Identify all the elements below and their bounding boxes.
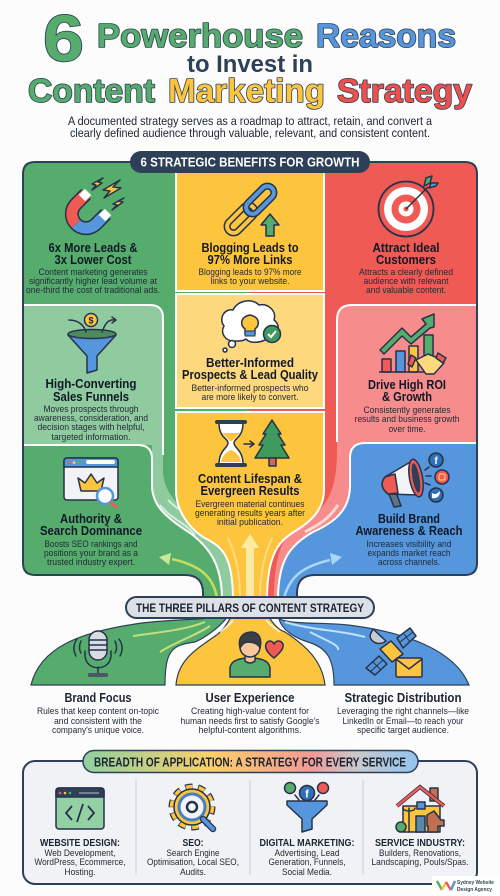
pillar shape: blue <box>279 619 469 685</box>
text: roi: results and business growth <box>354 414 460 424</box>
icon: person and heart <box>230 632 283 677</box>
text: blogging: Blogging Leads to <box>202 241 299 255</box>
text: better-informed <box>182 356 318 402</box>
text: better-informed: Better-informed prospects who <box>192 383 308 393</box>
text: funnels: High-Converting <box>46 377 136 391</box>
text: authority: trusted industry expert. <box>47 557 135 567</box>
text: website design: Web Development, <box>44 848 116 858</box>
text: user experience: helpful-content algorithms. <box>198 725 302 735</box>
text: website design <box>34 838 126 877</box>
text: reach <box>356 512 462 567</box>
text: website design: WEBSITE DESIGN: <box>40 838 120 849</box>
text: strategic distribution: Leveraging the right channels—like <box>337 706 469 716</box>
text: leads: 6x More Leads & <box>48 241 138 255</box>
text: reach: Build Brand <box>378 512 440 526</box>
title <box>28 1 473 109</box>
arrow: flow to reach <box>284 553 342 598</box>
icon: growth chart and handshake <box>379 314 446 374</box>
text: brand focus <box>37 690 159 735</box>
title: Powerhouse <box>97 17 303 54</box>
text: brand focus: Rules that keep content on-topic <box>37 706 159 716</box>
text: reach: Awareness & Reach <box>356 524 462 538</box>
text: evergreen: initial publication. <box>217 517 283 527</box>
text: strategic distribution <box>337 690 469 735</box>
icon: megaphone and social <box>382 453 449 507</box>
text: digital marketing: Generation, Funnels, <box>268 857 346 867</box>
text: leads: significantly higher lead volume at <box>29 276 157 286</box>
text: service industry: Landscaping, Pouls/Spas. <box>372 857 468 867</box>
text: seo: Audits. <box>180 867 206 877</box>
icon: funnel: $ <box>88 316 94 326</box>
text: evergreen: generating results years after <box>195 508 305 518</box>
text: better-informed: Prospects & Lead Quality <box>182 368 318 382</box>
text: funnels: awareness, consideration, and <box>34 413 148 423</box>
arrow: flow to authority <box>159 553 217 598</box>
text: seo: Optimisation, Local SEO, <box>147 857 239 867</box>
text: user experience: User Experience <box>206 690 294 705</box>
text: roi: Drive High ROI <box>368 378 446 392</box>
text: roi: Consistently generates <box>364 405 451 415</box>
heading: pillars pill <box>126 597 374 618</box>
text: service industry: SERVICE INDUSTRY: <box>375 838 465 849</box>
text: authority: Boosts SEO rankings and <box>44 539 138 549</box>
icon: social funnel <box>284 782 328 832</box>
text: user experience <box>180 690 320 735</box>
text: evergreen <box>195 472 305 527</box>
icon: target <box>378 176 438 236</box>
text: reach: across channels. <box>378 557 440 567</box>
text: brand focus: company's unique voice. <box>52 725 144 735</box>
text: leads: one-third the cost of traditional ads. <box>26 285 160 295</box>
heading: breadth pill: BREADTH OF APPLICATION: A STRATEGY FOR EVERY SERVICE <box>94 756 406 770</box>
heading: benefits pill: 6 STRATEGIC BENEFITS FOR GROWTH <box>140 156 360 170</box>
text: authority <box>40 512 142 567</box>
title: 6 <box>43 1 84 75</box>
text: better-informed: are more likely to convert. <box>202 392 298 402</box>
text: roi: & Growth <box>382 390 432 404</box>
text: user experience: human needs first to satisfy Google's <box>180 716 320 726</box>
arrow: flow up to centre <box>228 534 272 598</box>
pillar shape: green <box>31 616 228 685</box>
text: strategic distribution: LinkedIn or Email—to reach your <box>342 716 464 726</box>
text: service industry <box>372 838 468 867</box>
text: evergreen: Evergreen material continues <box>196 499 305 509</box>
text: user experience: Creating high-value content for <box>191 706 309 716</box>
text: blogging <box>198 241 302 286</box>
text: authority: Authority & <box>60 512 122 526</box>
text: better-informed: Better-Informed <box>206 356 294 370</box>
pillar shape: yellow <box>176 617 325 685</box>
icon: seo gear <box>172 787 213 829</box>
icon: idea cloud <box>222 301 280 352</box>
panel: three pillars <box>31 597 469 735</box>
text: customers: and valuable content. <box>366 285 446 295</box>
heading: pillars pill: THE THREE PILLARS OF CONTENT STRATEGY <box>136 601 365 615</box>
text: funnels: decision stages with helpful, <box>38 422 144 432</box>
text: seo: SEO: <box>182 838 204 849</box>
icon: house and tools <box>396 787 444 832</box>
text: funnels: Moves prospects through <box>44 404 138 414</box>
text: funnels: Sales Funnels <box>53 390 129 404</box>
text: strategic distribution: Strategic Distribution <box>344 690 462 705</box>
text: roi: over time. <box>388 424 426 434</box>
text: brand focus: Brand Focus <box>64 690 132 705</box>
text: seo: Search Engine <box>166 848 220 858</box>
title: Marketing <box>168 72 325 109</box>
text: website design: Hosting. <box>64 867 96 877</box>
text: funnels: targeted information. <box>52 432 130 442</box>
logo: agency badge: Design Agency <box>457 887 493 893</box>
icon: funnel <box>68 314 116 373</box>
icon: browser and crown <box>64 458 118 507</box>
text: seo <box>147 838 239 877</box>
icon: megaphone and social: f <box>434 456 438 467</box>
title: to Invest in <box>187 51 313 78</box>
text: reach: Increases visibility and <box>366 539 452 549</box>
text: customers: Attracts a clearly defined <box>359 267 453 277</box>
logo: agency badge <box>432 876 500 896</box>
icon: microphone <box>74 631 122 677</box>
text: strategic distribution: specific target audience. <box>357 725 449 735</box>
icon: chain link <box>224 183 279 236</box>
text: digital marketing: Advertising, Lead <box>274 848 340 858</box>
text: leads: Content marketing generates <box>38 267 148 277</box>
text: authority: Search Dominance <box>40 524 142 538</box>
text: reach: expands market reach <box>368 548 450 558</box>
text: customers: Customers <box>376 253 436 267</box>
text: leads: 3x Lower Cost <box>54 253 132 267</box>
icon: magnet <box>72 178 124 228</box>
panel: six benefits <box>22 151 478 596</box>
icon: social funnel: f <box>305 788 309 800</box>
text: service industry: Builders, Renovations, <box>379 848 461 858</box>
text: customers: Attract Ideal <box>372 241 440 255</box>
text: brand focus: and consistent with the <box>54 716 142 726</box>
subtitle: A documented strategy serves as a roadmap to attract, retain, and convert a <box>68 114 432 128</box>
logo: agency badge: Sydney Website <box>457 880 494 886</box>
icon: code window <box>56 788 104 829</box>
heading: benefits pill <box>130 151 370 173</box>
text: roi <box>354 378 460 434</box>
text: funnels <box>34 377 148 442</box>
icon: hourglass and tree <box>215 420 289 467</box>
text: blogging: 97% More Links <box>208 253 292 267</box>
panel: breadth of application <box>23 750 477 884</box>
title: Strategy <box>337 72 473 109</box>
text: blogging: Blogging leads to 97% more <box>198 267 302 277</box>
text: evergreen: Content Lifespan & <box>198 472 302 486</box>
title: Content <box>28 72 155 109</box>
text: digital marketing: DIGITAL MARKETING: <box>260 838 354 849</box>
text: evergreen: Evergreen Results <box>200 484 300 498</box>
icon: satellite and envelope <box>366 628 422 677</box>
text: authority: positions your brand as a <box>44 548 139 558</box>
text: leads <box>26 241 160 295</box>
text: customers <box>359 241 453 295</box>
subtitle: clearly defined audience through valuable, relevant, and consistent content. <box>70 126 430 140</box>
title: Reasons <box>316 17 456 54</box>
text: digital marketing: Social Media. <box>282 867 332 877</box>
subtitle <box>68 114 432 140</box>
text: website design: WordPress, Ecommerce, <box>34 857 126 867</box>
text: customers: audience with relevant <box>364 276 449 286</box>
text: digital marketing <box>260 838 354 877</box>
text: blogging: links to your website. <box>210 276 290 286</box>
heading: breadth pill <box>83 750 418 772</box>
